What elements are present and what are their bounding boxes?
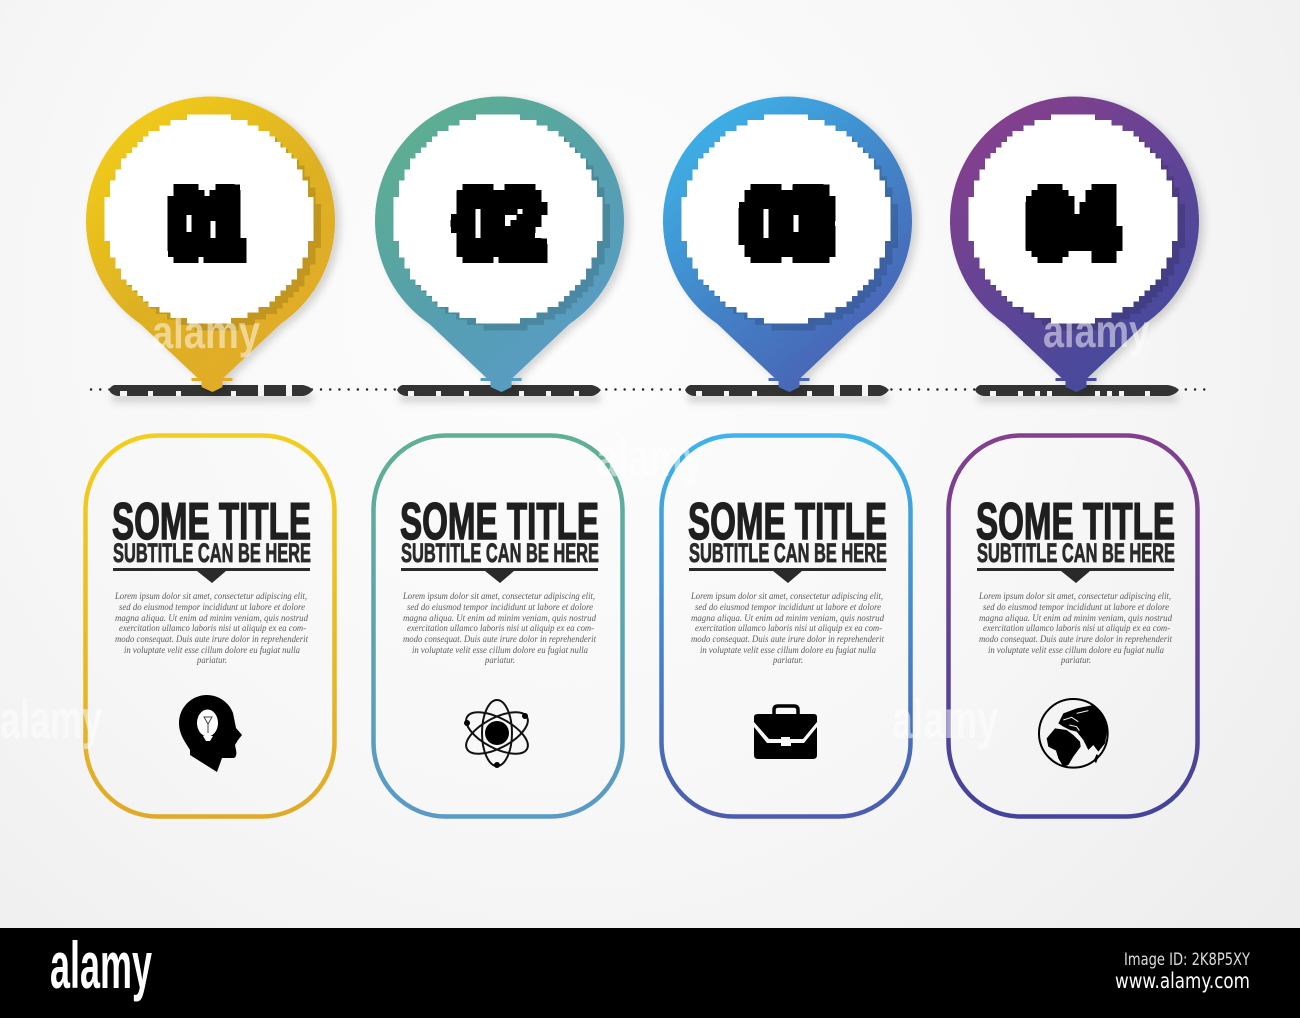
body text: pariatur. — [1060, 655, 1091, 665]
body text: in voluptate velit esse cillum dolore eu fugiat nulla — [124, 645, 300, 655]
heading — [688, 493, 887, 583]
body text: exercitation ullamco laboris nisi ut aliquip ex ea com- — [983, 623, 1170, 633]
watermarks over pins — [152, 305, 1150, 358]
number 01: 01 — [168, 170, 245, 278]
heading: SOME TITLE — [400, 493, 599, 551]
body text: modo consequat. Duis aute irure dolor in reprehenderit — [403, 634, 596, 644]
heading: SUBTITLE CAN BE HERE — [113, 538, 311, 568]
heading: SOME TITLE — [112, 493, 311, 551]
body text: modo consequat. Duis aute irure dolor in reprehenderit — [691, 634, 884, 644]
body text: in voluptate velit esse cillum dolore eu fugiat nulla — [412, 645, 588, 655]
body text: sed do eiusmod tempor incididunt ut labore et dolore — [983, 602, 1169, 612]
heading: SUBTITLE CAN BE HERE — [977, 538, 1175, 568]
icon: briefcase — [754, 706, 817, 759]
pin 3 — [663, 97, 912, 392]
icon: head with light bulb — [179, 695, 242, 772]
body text: magna aliqua. Ut enim ad minim veniam, quis nostrud — [691, 613, 884, 623]
panel: card 1 — [86, 436, 334, 816]
body text — [114, 591, 308, 665]
watermark text: alamy — [892, 690, 998, 750]
watermark text: alamy — [597, 428, 703, 488]
number 04: 04 — [1028, 170, 1117, 278]
body text: pariatur. — [196, 655, 227, 665]
pin 2 — [375, 97, 624, 392]
body text: Lorem ipsum dolor sit amet, consectetur adipiscing elit, — [114, 591, 307, 601]
timeline marker bars — [109, 385, 1179, 402]
footer band — [0, 928, 1300, 1018]
heading: SUBTITLE CAN BE HERE — [401, 538, 599, 568]
pin 4 — [950, 97, 1199, 392]
body text: sed do eiusmod tempor incididunt ut labore et dolore — [119, 602, 305, 612]
body text: magna aliqua. Ut enim ad minim veniam, quis nostrud — [403, 613, 596, 623]
number 03: 03 — [743, 170, 834, 278]
watermark text — [0, 428, 998, 750]
watermark text: alamy — [0, 690, 102, 750]
watermarks over pins: alamy — [1043, 305, 1150, 357]
heading — [976, 493, 1175, 583]
body text: Lorem ipsum dolor sit amet, consectetur adipiscing elit, — [978, 591, 1171, 601]
website: www.alamy.com — [1115, 969, 1250, 993]
body text: modo consequat. Duis aute irure dolor in reprehenderit — [979, 634, 1172, 644]
heading: SOME TITLE — [688, 493, 887, 551]
body text: exercitation ullamco laboris nisi ut aliquip ex ea com- — [407, 623, 594, 633]
panel: card 4 — [948, 436, 1198, 816]
heading — [112, 493, 311, 583]
footer logo: alamy — [50, 928, 152, 1002]
icon: globe — [1039, 699, 1108, 768]
timeline dotted line — [91, 388, 1210, 391]
body text: magna aliqua. Ut enim ad minim veniam, quis nostrud — [115, 613, 308, 623]
body text: sed do eiusmod tempor incididunt ut labore et dolore — [407, 602, 593, 612]
body text: exercitation ullamco laboris nisi ut aliquip ex ea com- — [119, 623, 306, 633]
body text — [690, 591, 884, 665]
body text: modo consequat. Duis aute irure dolor in reprehenderit — [115, 634, 308, 644]
heading: SOME TITLE — [976, 493, 1175, 551]
watermarks over pins: alamy — [152, 306, 260, 358]
body text — [978, 591, 1172, 665]
body text — [402, 591, 596, 665]
body text: Lorem ipsum dolor sit amet, consectetur adipiscing elit, — [690, 591, 883, 601]
body text: Lorem ipsum dolor sit amet, consectetur adipiscing elit, — [402, 591, 595, 601]
pin 1 — [86, 97, 335, 392]
icon: atom — [460, 700, 534, 768]
body text: in voluptate velit esse cillum dolore eu fugiat nulla — [988, 645, 1164, 655]
body text: magna aliqua. Ut enim ad minim veniam, quis nostrud — [979, 613, 1172, 623]
panel: card 3 — [662, 436, 910, 816]
body text: exercitation ullamco laboris nisi ut aliquip ex ea com- — [695, 623, 882, 633]
body text: pariatur. — [772, 655, 803, 665]
number 02: 02 — [456, 170, 543, 278]
body text: sed do eiusmod tempor incididunt ut labore et dolore — [695, 602, 881, 612]
heading — [400, 493, 599, 583]
panel: card 2 — [374, 436, 622, 816]
body text: in voluptate velit esse cillum dolore eu fugiat nulla — [700, 645, 876, 655]
image id: Image ID: 2K8P5XY — [1124, 950, 1250, 970]
body text: pariatur. — [484, 655, 515, 665]
heading: SUBTITLE CAN BE HERE — [689, 538, 887, 568]
